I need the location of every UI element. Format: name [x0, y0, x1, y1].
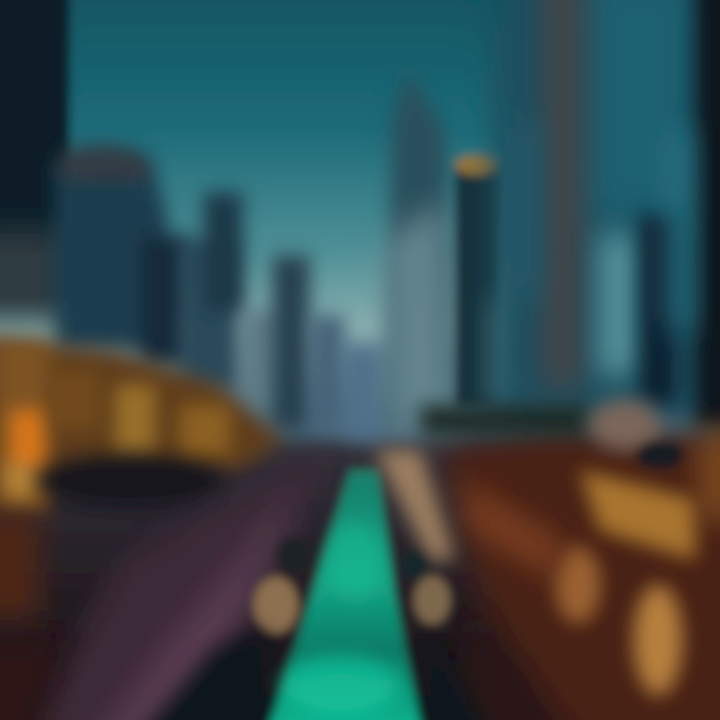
green lane [262, 470, 425, 720]
right orange road and lights [420, 400, 720, 720]
central towers [385, 70, 540, 430]
dark road edges beside green lane [130, 630, 500, 720]
pale lights beside green lane [254, 450, 455, 633]
left road [0, 450, 330, 720]
right buildings [492, 0, 720, 430]
left orange storefronts [0, 335, 285, 620]
street ground [0, 440, 720, 720]
left skyline buildings [0, 0, 385, 440]
